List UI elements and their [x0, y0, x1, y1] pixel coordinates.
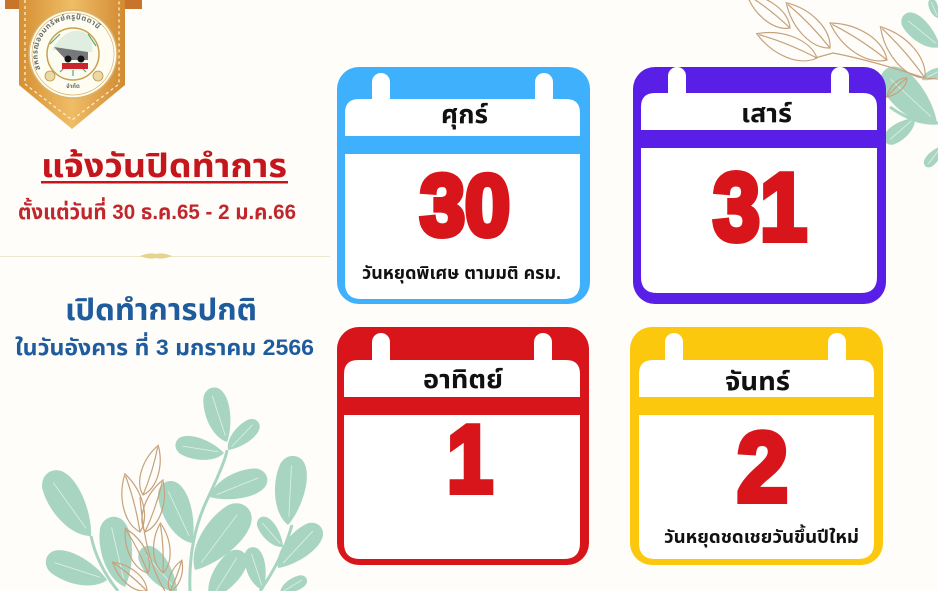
day label: Sunday: อาทิตย์ [423, 364, 503, 394]
calendar card: Sunday 1 [337, 327, 589, 565]
day label: Monday: จันทร์ [725, 366, 790, 396]
ribbon badge with logo seal: สหกรณ์ออมทรัพย์ครูปัตตานี [33, 13, 102, 70]
heading: normal opening: เปิดทำการปกติ [65, 294, 257, 327]
date number: 2: 2 [737, 412, 788, 522]
ribbon badge with logo seal: จำกัด [66, 83, 80, 90]
title: closure notice: แจ้งวันปิดทำการ [41, 147, 287, 184]
day label: Friday: ศุกร์ [441, 99, 488, 130]
date number: 1: 1 [447, 406, 493, 513]
ribbon badge with logo seal [5, 0, 142, 129]
subtitle: closure date range: ตั้งแต่วันที่ 30 ธ.ค.65 - 2 ม.ค.66 [18, 197, 296, 224]
date number: 30: 30 [420, 158, 510, 254]
date number: 31: 31 [713, 154, 807, 261]
divider ornament [0, 253, 330, 259]
day label: Saturday: เสาร์ [741, 98, 792, 128]
subheading: reopening date: ในวันอังคาร ที่ 3 มกราคม 2566 [15, 332, 314, 360]
calendar card: Monday 2 [630, 327, 883, 565]
note: special holiday: วันหยุดพิเศษ ตามมติ ครม. [362, 263, 561, 284]
decoration: bottom-left leaves [34, 385, 329, 591]
note: substitute new year holiday: วันหยุดชดเชยวันขึ้นปีใหม่ [664, 524, 859, 548]
calendar card: Saturday 31 [633, 67, 886, 304]
decoration: top-right leaves [741, 0, 938, 170]
calendar card: Friday 30 [337, 67, 590, 304]
